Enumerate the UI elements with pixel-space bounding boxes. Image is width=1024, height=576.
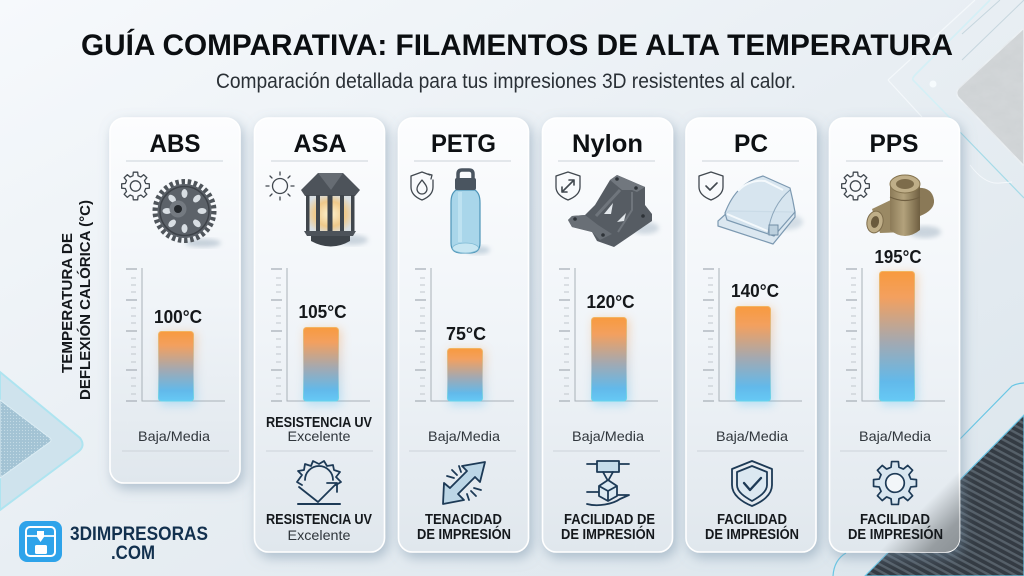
label: PETG property: TENACIDAD	[425, 512, 502, 528]
label: PPS property: DE IMPRESIÓN	[848, 525, 943, 543]
panel: PC	[686, 118, 816, 552]
heading: PETG: PETG	[431, 130, 496, 158]
label: PC property: DE IMPRESIÓN	[705, 525, 799, 543]
panel: PPS	[830, 118, 960, 552]
label: PPS property: FACILIDAD	[860, 512, 930, 528]
icon: UV reflection	[297, 461, 341, 504]
icon: shield with check	[699, 172, 723, 200]
object: PPS fitting	[865, 175, 941, 238]
label: Nylon property: FACILIDAD DE	[564, 512, 655, 528]
label: ASA UV upper: Excelente	[288, 428, 351, 444]
heading: Nylon: Nylon	[572, 130, 643, 158]
label: PC property	[705, 512, 799, 543]
label: PETG rating: Baja/Media	[428, 428, 500, 444]
object: ABS gear	[156, 182, 221, 247]
heading: PPS: PPS	[870, 130, 918, 158]
icon: shield check large	[732, 461, 772, 506]
subtitle: Comparación detallada para tus impresiones 3D resistentes al calor.	[216, 70, 796, 93]
label: ASA UV lower	[266, 512, 372, 543]
panel: ABS	[110, 118, 240, 483]
object: PC cover	[718, 176, 803, 244]
label: ASA UV upper	[266, 415, 372, 444]
chart: ASA temperature: 105°C	[298, 302, 346, 322]
panel: ASA	[254, 118, 384, 552]
y-axis label: TEMPERATURA DE	[60, 233, 76, 373]
icon: toughness arrows	[443, 462, 485, 504]
icon: gear outline	[842, 172, 869, 200]
label: ASA UV upper: RESISTENCIA UV	[266, 415, 372, 431]
icon: gear outline	[122, 172, 149, 200]
panel: PETG	[398, 118, 528, 552]
chart: ABS temperature	[126, 268, 225, 405]
label: PPS rating: Baja/Media	[859, 428, 931, 444]
chart: ABS temperature: 100°C	[154, 307, 202, 327]
icon: shield with drop	[411, 172, 433, 200]
chart: Nylon temperature: 120°C	[586, 292, 634, 312]
icon: gear large	[874, 462, 916, 504]
chart: PPS temperature: 195°C	[874, 247, 922, 267]
heading: ABS: ABS	[150, 130, 200, 158]
label: PPS property	[848, 512, 943, 543]
icon: shield with arrow	[556, 172, 580, 200]
chart: ASA temperature	[271, 268, 370, 405]
label: Nylon property	[561, 512, 655, 543]
label: Nylon property: DE IMPRESIÓN	[561, 525, 655, 543]
heading: PC: PC	[734, 130, 768, 158]
label: PC rating: Baja/Media	[716, 428, 788, 444]
label: Nylon rating: Baja/Media	[572, 428, 644, 444]
decoration: fabric and glass top right	[888, 0, 1024, 198]
chart: PETG temperature: 75°C	[446, 324, 486, 344]
logo: 3DIMPRESORAS.COM: .COM	[111, 543, 155, 564]
label: ABS rating: Baja/Media	[138, 428, 210, 444]
y-axis label: DEFLEXIÓN CALÓRICA (°C)	[76, 200, 94, 400]
object: PETG bottle	[451, 170, 490, 254]
label: PETG property: DE IMPRESIÓN	[417, 525, 511, 543]
label: ASA UV lower: RESISTENCIA UV	[266, 512, 372, 528]
icon: 3D printer	[587, 461, 629, 505]
y-axis label	[60, 200, 94, 400]
icon: logo printer	[19, 521, 62, 562]
chart: PC temperature: 140°C	[731, 281, 779, 301]
object: Nylon bracket	[568, 175, 659, 247]
logo: 3DIMPRESORAS.COM	[19, 521, 208, 564]
title: GUÍA COMPARATIVA: FILAMENTOS DE ALTA TEMPERATURA	[81, 28, 953, 62]
label: PC property: FACILIDAD	[717, 512, 787, 528]
label: PETG property	[417, 512, 511, 543]
chart: PPS temperature	[846, 247, 945, 405]
decoration: glass panel bottom left	[0, 372, 83, 510]
object: ASA lantern	[301, 173, 368, 246]
heading: ASA: ASA	[294, 130, 346, 158]
chart: Nylon temperature	[559, 268, 658, 405]
decoration: carbon fibre bottom right	[833, 383, 1024, 576]
chart: PETG temperature	[415, 268, 514, 405]
label: ASA UV lower: Excelente	[288, 527, 351, 543]
chart: PC temperature	[703, 268, 802, 405]
icon: sun	[266, 172, 294, 200]
logo: 3DIMPRESORAS.COM: 3DIMPRESORAS	[70, 524, 208, 545]
panel: Nylon	[542, 118, 672, 552]
